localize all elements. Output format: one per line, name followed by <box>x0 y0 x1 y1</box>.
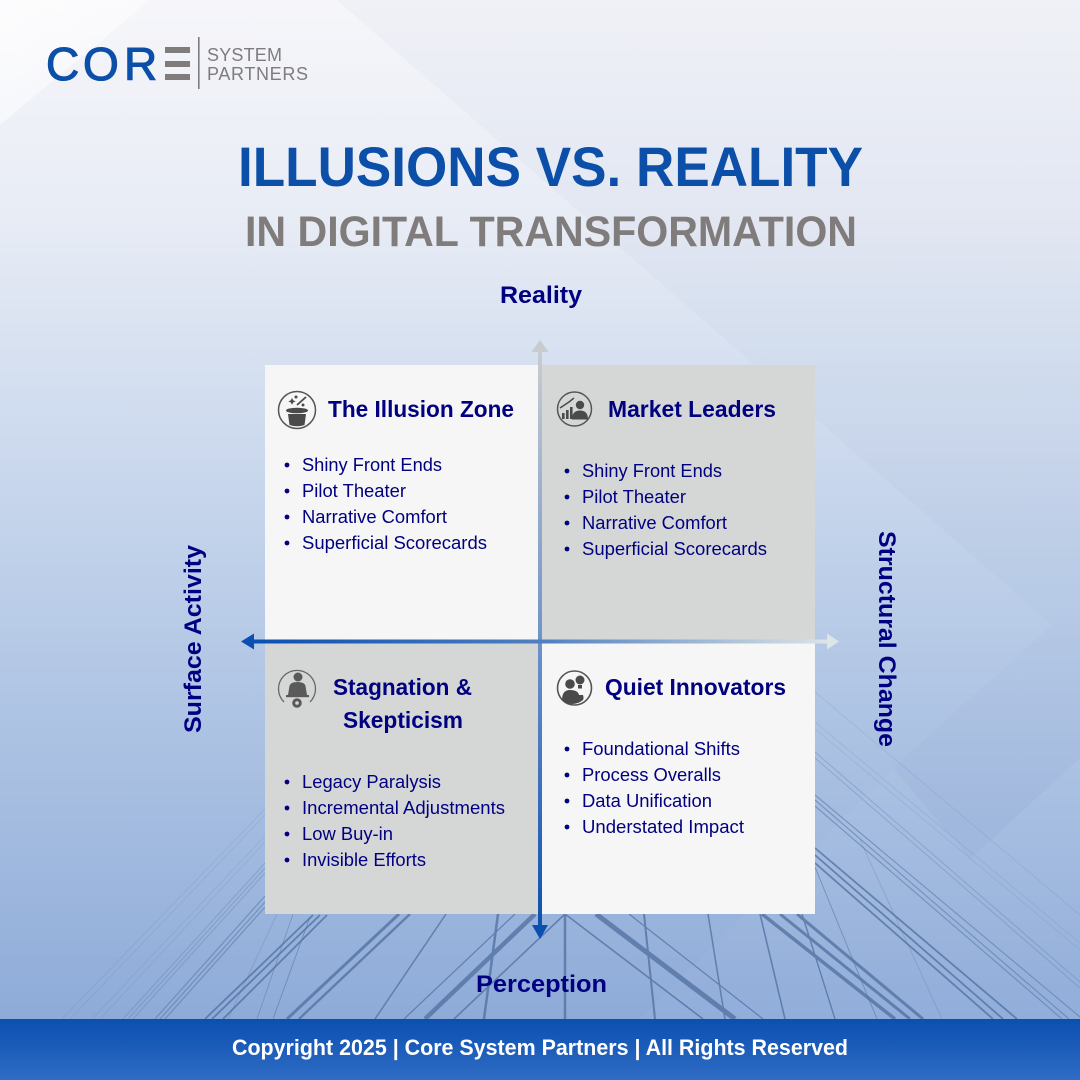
heading: Quiet Innovators <box>605 674 786 700</box>
bullet list <box>285 455 487 553</box>
bullet list: Low Buy-in <box>302 824 393 844</box>
heading: Skepticism <box>343 707 463 733</box>
arrow: vertical axis <box>532 340 548 939</box>
bullet list: Data Unification <box>582 791 712 811</box>
footer copyright text: Copyright 2025 | Core System Partners | All Rights Reserved <box>232 1035 848 1060</box>
icon: people with light bulb <box>558 671 592 705</box>
logo divider <box>198 37 200 89</box>
icon: leader with growth chart <box>558 392 592 426</box>
bullet list: Pilot Theater <box>302 481 406 501</box>
subtitle: IN DIGITAL TRANSFORMATION <box>245 208 857 256</box>
bullet list: Process Overalls <box>582 765 721 785</box>
bullet list <box>565 739 744 837</box>
bullet list <box>285 772 505 870</box>
arrow: horizontal axis <box>241 634 839 650</box>
bullet list: Shiny Front Ends <box>582 461 722 481</box>
heading: The Illusion Zone <box>328 396 514 422</box>
icon: stalled worker with gear <box>278 670 316 708</box>
logo wordmark: CORE: COR <box>46 38 157 90</box>
panel: The Illusion Zone <box>265 365 540 641</box>
panel: Quiet Innovators <box>540 641 815 914</box>
bullet list: Superficial Scorecards <box>582 539 767 559</box>
title: ILLUSIONS VS. REALITY <box>238 135 863 198</box>
bullet list: Narrative Comfort <box>582 513 727 533</box>
bullet list: Shiny Front Ends <box>302 455 442 475</box>
panel: Market Leaders <box>540 365 815 641</box>
icon: magic hat <box>278 392 316 428</box>
heading: Market Leaders <box>608 396 776 422</box>
bullet list: Superficial Scorecards <box>302 533 487 553</box>
axis label: Reality: Reality <box>500 282 583 309</box>
bullet list: Pilot Theater <box>582 487 686 507</box>
bullet list <box>565 461 767 559</box>
logo text: system partners: SYSTEM <box>207 45 282 65</box>
logo text: system partners: PARTNERS <box>207 64 308 84</box>
bullet list: Legacy Paralysis <box>302 772 441 792</box>
heading: Stagnation & <box>333 674 472 700</box>
heading <box>333 674 472 733</box>
bullet list: Invisible Efforts <box>302 850 426 870</box>
logo E bars <box>165 47 190 80</box>
logo <box>46 37 308 90</box>
logo text: system partners <box>207 45 308 84</box>
bullet list: Narrative Comfort <box>302 507 447 527</box>
bullet list: Foundational Shifts <box>582 739 740 759</box>
footer bar <box>0 1019 1080 1080</box>
axis label: Perception: Perception <box>476 971 607 998</box>
axis label: Structural Change: Structural Change <box>873 531 900 747</box>
bullet list: Incremental Adjustments <box>302 798 505 818</box>
axis label: Surface Activity: Surface Activity <box>180 544 207 733</box>
bullet list: Understated Impact <box>582 817 744 837</box>
panel: Stagnation and Skepticism <box>265 641 540 914</box>
